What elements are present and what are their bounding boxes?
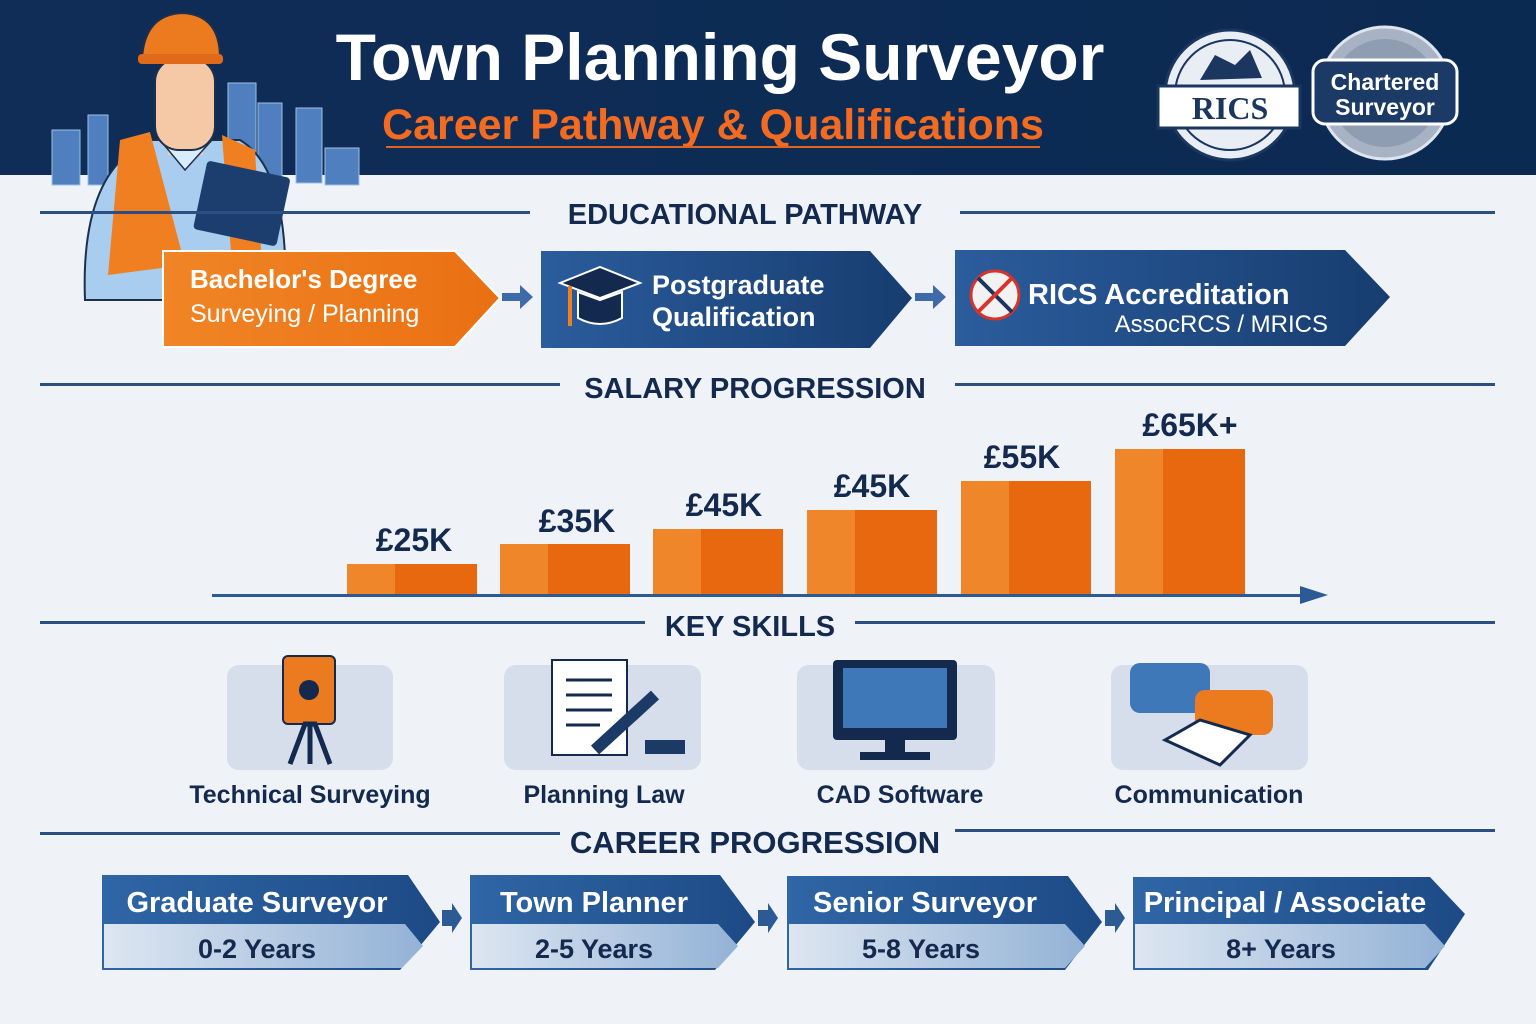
skill: communication: Communication	[1115, 781, 1303, 809]
career: graduate surveyor: 0-2 Years	[198, 934, 316, 964]
badge: Chartered Surveyor	[1313, 27, 1457, 159]
skill: planning law	[504, 660, 701, 809]
badge: RICS: RICS	[1192, 90, 1268, 126]
arrow	[915, 285, 946, 309]
arrow	[1105, 903, 1125, 933]
step: RICS accreditation: RICS Accreditation	[1028, 279, 1290, 311]
career: graduate surveyor	[102, 875, 440, 970]
skill: planning law: Planning Law	[523, 781, 685, 809]
career: graduate surveyor: Graduate Surveyor	[126, 887, 388, 919]
section heading: key skills	[40, 611, 1495, 643]
illustration: city skyline	[52, 83, 359, 185]
career: principal / associate: Principal / Associate	[1144, 887, 1426, 919]
step: bachelor's degree	[163, 251, 500, 347]
section heading: educational pathway: EDUCATIONAL PATHWAY	[568, 199, 922, 231]
skill: CAD software: CAD Software	[817, 781, 983, 809]
section heading: key skills: KEY SKILLS	[665, 611, 835, 643]
bar chart: salary: £35K	[539, 503, 615, 539]
step: postgraduate	[541, 251, 912, 348]
section heading: career progression	[40, 825, 1495, 860]
step: postgraduate: Postgraduate	[652, 270, 825, 300]
section heading: salary progression	[40, 373, 1495, 405]
step: postgraduate: Qualification	[652, 302, 816, 332]
bar chart: salary: £25K	[376, 522, 452, 558]
arrow	[758, 903, 778, 933]
step: RICS accreditation: AssocRCS / MRICS	[1115, 311, 1328, 338]
title: Town Planning Surveyor	[336, 20, 1104, 94]
bar chart: salary: £65K+	[1142, 407, 1238, 443]
step: bachelor's degree: Bachelor's Degree	[190, 264, 417, 294]
section heading: educational pathway	[40, 199, 1495, 231]
badge: Chartered Surveyor: Chartered	[1331, 69, 1439, 95]
career: town planner: 2-5 Years	[535, 934, 653, 964]
header banner	[0, 0, 1536, 175]
bar chart: salary	[212, 407, 1328, 604]
career: town planner	[470, 875, 755, 970]
career: senior surveyor	[787, 876, 1102, 970]
career: town planner: Town Planner	[500, 887, 688, 919]
career: senior surveyor: Senior Surveyor	[813, 887, 1037, 919]
skill: technical surveying: Technical Surveying	[189, 781, 431, 809]
section heading: salary progression: SALARY PROGRESSION	[584, 373, 926, 405]
subtitle: Career Pathway & Qualifications	[382, 101, 1044, 149]
illustration: surveyor person	[85, 13, 291, 300]
arrow	[502, 285, 533, 309]
badge: RICS	[1158, 30, 1300, 160]
step: RICS accreditation	[955, 250, 1390, 346]
skill: communication	[1111, 663, 1308, 809]
step: bachelor's degree: Surveying / Planning	[190, 300, 419, 328]
bar chart: salary: £55K	[984, 439, 1060, 475]
bar chart: salary: £45K	[686, 487, 762, 523]
skill: technical surveying	[189, 656, 431, 809]
career: principal / associate	[1133, 877, 1465, 970]
arrow	[442, 903, 462, 933]
career: senior surveyor: 5-8 Years	[862, 934, 980, 964]
bar chart: salary: £45K	[834, 468, 910, 504]
section heading: career progression: CAREER PROGRESSION	[570, 825, 940, 860]
skill: CAD software	[797, 660, 995, 809]
badge: Chartered Surveyor: Surveyor	[1335, 94, 1435, 120]
career: principal / associate: 8+ Years	[1226, 934, 1336, 964]
